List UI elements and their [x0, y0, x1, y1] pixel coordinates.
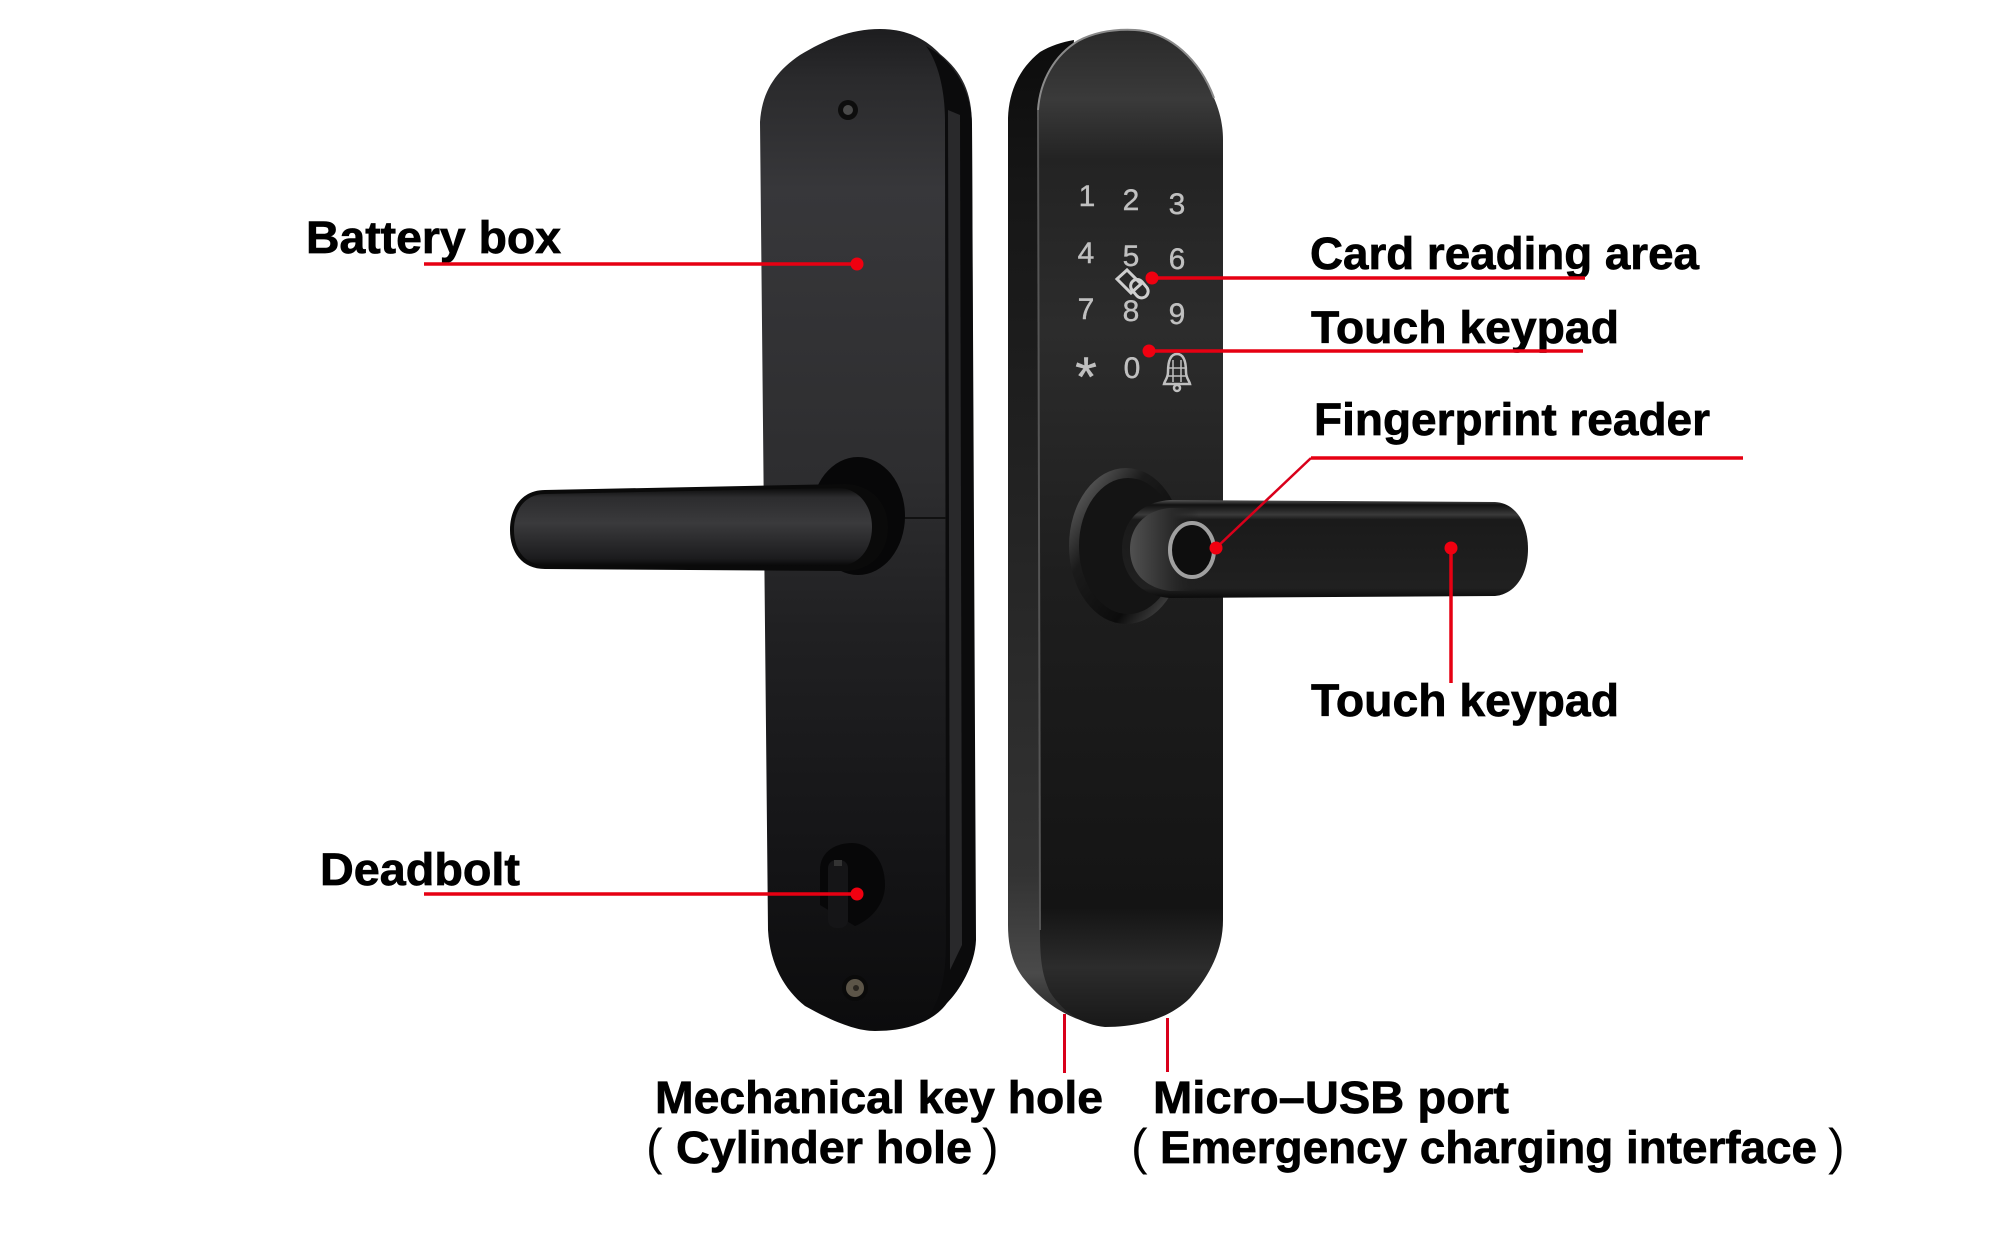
side edge of back panel	[925, 46, 976, 1021]
keypad digits: 5	[1123, 240, 1139, 273]
keypad digits: 9	[1169, 298, 1185, 331]
keypad digits	[1075, 180, 1185, 408]
keypad digits: 6	[1169, 243, 1185, 276]
front panel body	[1038, 30, 1223, 1027]
fingerprint sensor	[1170, 523, 1214, 577]
handle: back	[510, 484, 888, 571]
callout: mechanical key hole: Cylinder hole	[676, 1122, 972, 1173]
back panel body	[760, 29, 975, 1031]
icon: card symbol	[1117, 270, 1151, 301]
deadbolt knob	[820, 843, 885, 928]
callout: card reading area: Card reading area	[1310, 228, 1700, 279]
callout: fingerprint reader: Fingerprint reader	[1314, 394, 1710, 445]
screw: bottom	[842, 975, 868, 1001]
keypad digits: 0	[1124, 352, 1140, 385]
callout: micro-usb port: (	[1131, 1119, 1148, 1175]
callout: touch keypad upper	[1142, 302, 1619, 358]
callout: touch keypad upper: Touch keypad	[1311, 302, 1619, 353]
keypad digits: *	[1075, 345, 1097, 408]
callout: touch keypad lower: Touch keypad	[1311, 675, 1619, 726]
rosette: front	[1069, 468, 1183, 624]
callout: mechanical key hole: (	[646, 1119, 663, 1175]
callout: mechanical key hole: Mechanical key hole	[655, 1072, 1103, 1123]
keypad digits: 3	[1169, 188, 1185, 221]
callout: micro-usb port: Micro–USB port	[1153, 1072, 1509, 1123]
keypad digits: 8	[1123, 295, 1139, 328]
rosette: back	[811, 457, 905, 575]
callout: deadbolt: Deadbolt	[320, 844, 520, 895]
lock: front panel	[1008, 30, 1528, 1027]
callout: mechanical key hole: )	[982, 1119, 999, 1175]
callout: mechanical key hole	[646, 1014, 1103, 1175]
handle: front	[1122, 500, 1528, 598]
callout: battery box: Battery box	[306, 212, 561, 263]
lock: back panel	[510, 29, 976, 1031]
keypad digits: 7	[1078, 293, 1094, 326]
keypad digits: 1	[1079, 180, 1095, 213]
callout: micro-usb port: Emergency charging interface	[1160, 1122, 1817, 1173]
side edge of front panel	[1008, 40, 1090, 1023]
icon: bell	[1164, 354, 1190, 391]
screw: top	[838, 100, 858, 120]
callout: micro-usb port: )	[1828, 1119, 1845, 1175]
callout: deadbolt	[320, 844, 864, 900]
callout: micro-usb port	[1131, 1018, 1845, 1175]
callout: battery box	[306, 212, 864, 270]
callout: touch keypad lower	[1311, 542, 1619, 726]
callout: card reading area	[1146, 228, 1700, 284]
bevel highlight	[1038, 30, 1214, 110]
keypad digits: 2	[1123, 184, 1139, 217]
callout: fingerprint reader	[1210, 394, 1743, 554]
keypad digits: 4	[1078, 237, 1094, 270]
seam	[900, 517, 946, 519]
